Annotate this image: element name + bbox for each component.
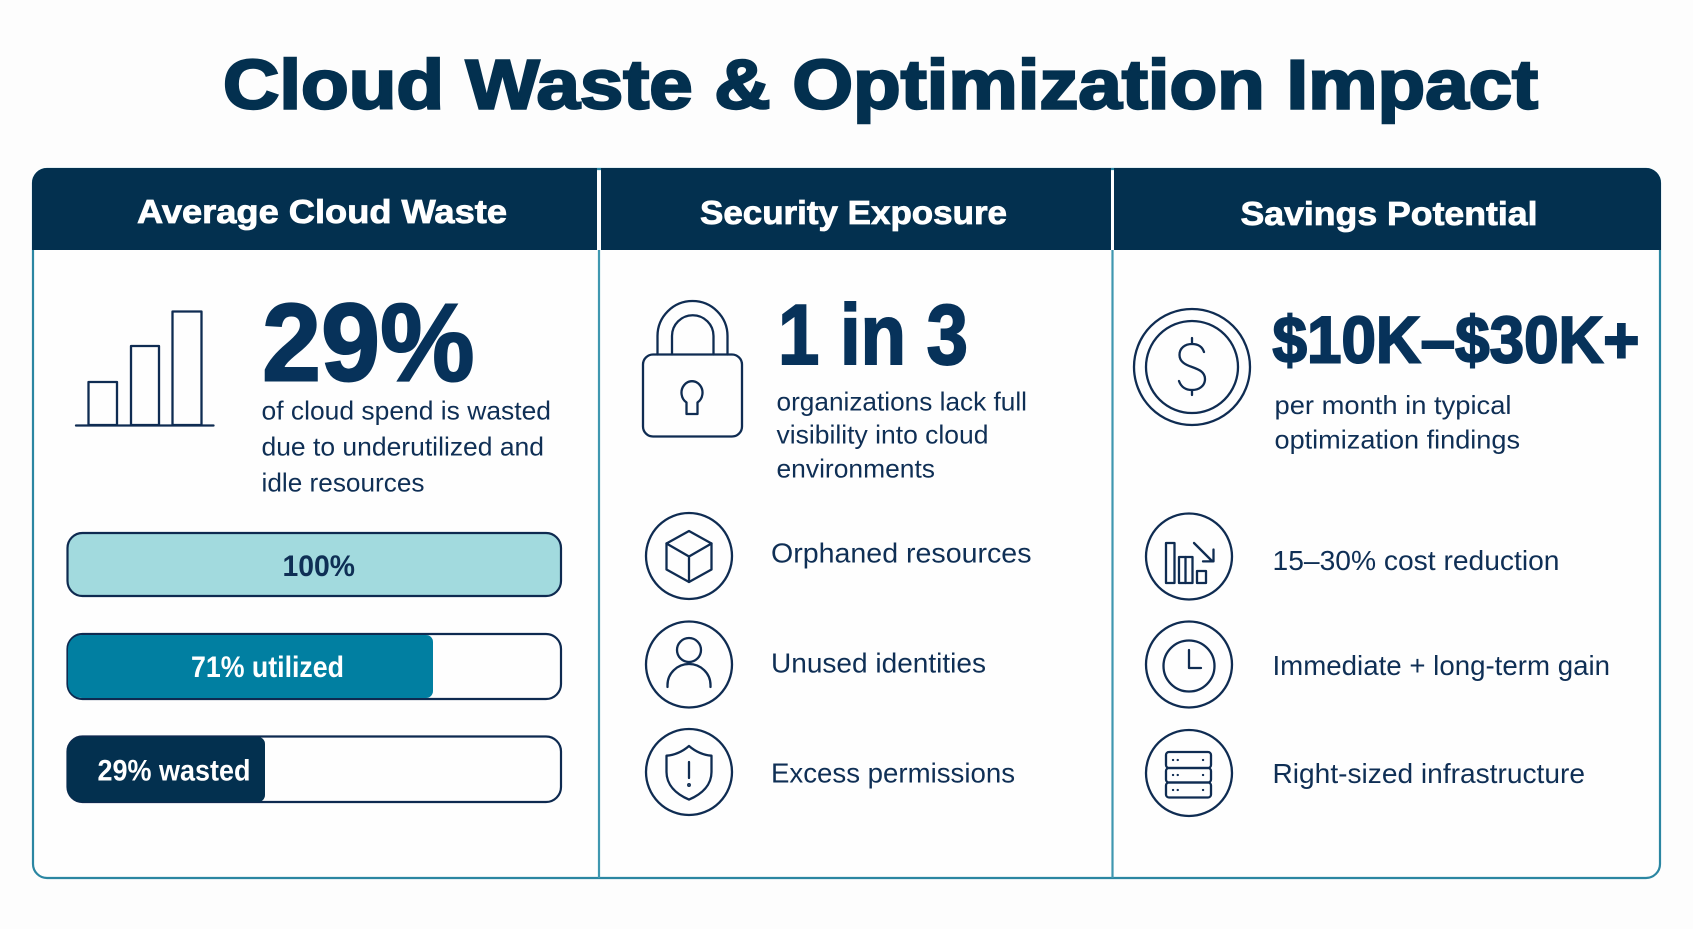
item: right-sized infrastructure: Right-sized infrastructure [1272, 758, 1585, 789]
panel frame [33, 169, 1660, 878]
bar: 100% [68, 533, 561, 596]
item: cost reduction [1146, 514, 1560, 600]
icon: padlock [643, 301, 742, 436]
text: visibility description: organizations lack full [776, 386, 1027, 416]
header: savings potential: Savings Potential [1240, 195, 1538, 232]
icon: clock [1146, 622, 1232, 708]
header: average cloud waste [32, 168, 597, 250]
bar: 71% utilized: 71% utilized [191, 651, 344, 684]
text: visibility description [776, 386, 1027, 484]
item: excess permissions [646, 729, 1015, 815]
bar: 71% utilized [68, 634, 561, 699]
icon: cube [646, 513, 732, 599]
text: waste description: idle resources [262, 468, 424, 498]
item: orphaned resources: Orphaned resources [771, 538, 1032, 568]
text: visibility description: environments [776, 454, 935, 484]
item: long-term gain [1146, 622, 1610, 708]
item: right-sized infrastructure [1146, 730, 1585, 816]
panel: average cloud waste [32, 168, 597, 802]
text: savings description [1274, 390, 1520, 454]
item: unused identities: Unused identities [771, 648, 986, 678]
panel: savings potential [1114, 168, 1661, 816]
header: average cloud waste: Average Cloud Waste [137, 193, 507, 230]
text: waste description [262, 396, 551, 498]
bar: 29% wasted: 29% wasted [98, 754, 250, 788]
text: savings description: optimization findings [1274, 424, 1520, 454]
item: cost reduction: 15–30% cost reduction [1272, 545, 1560, 576]
header: savings potential [1114, 168, 1661, 250]
stat: 29%: 29% [262, 282, 474, 404]
header: security exposure: Security Exposure [700, 194, 1007, 231]
item: excess permissions: Excess permissions [771, 758, 1015, 788]
text: savings description: per month in typical [1274, 390, 1512, 420]
panel: security exposure [601, 168, 1111, 815]
icon: shield [646, 729, 732, 815]
icon: dollar coin [1134, 309, 1250, 425]
text: visibility description: visibility into cloud [776, 420, 988, 450]
text: waste description: of cloud spend is wasted [262, 396, 551, 426]
text: waste description: due to underutilized and [262, 432, 544, 462]
stat: savings range: $10K–$30K+ [1272, 302, 1640, 376]
header: security exposure [601, 168, 1111, 250]
icon: server stack [1146, 730, 1232, 816]
bar: 100%: 100% [282, 550, 355, 583]
stat: 1 in 3: 1 in 3 [778, 288, 968, 383]
item: unused identities [646, 622, 986, 708]
item: long-term gain: Immediate + long-term gain [1272, 650, 1610, 681]
title: Cloud Waste & Optimization Impact [223, 46, 1538, 124]
bar: 29% wasted [67, 736, 561, 802]
icon: falling bars [1146, 514, 1232, 600]
icon: bar chart [76, 312, 214, 426]
icon: person [646, 622, 732, 708]
item: orphaned resources [646, 513, 1032, 599]
